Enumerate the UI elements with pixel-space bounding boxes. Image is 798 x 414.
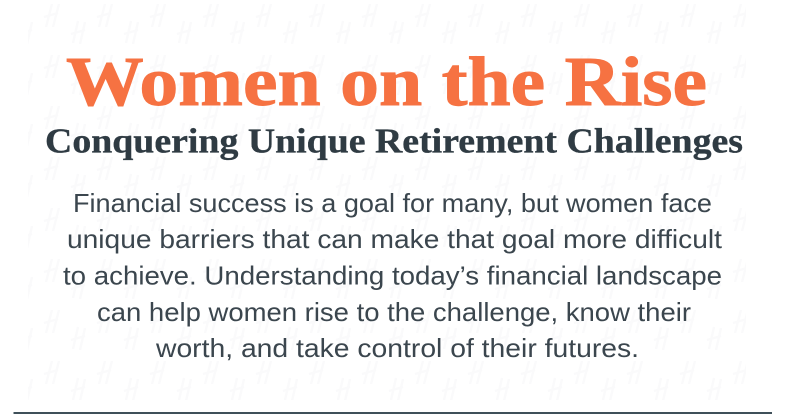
intro paragraph: unique barriers that can make that goal more difficult <box>67 226 722 254</box>
subtitle: Conquering Unique Retirement Challenges <box>45 122 743 160</box>
divider line <box>14 412 772 414</box>
intro paragraph: Financial success is a goal for many, but women face <box>73 190 712 218</box>
intro paragraph: can help women rise to the challenge, know their <box>97 299 691 327</box>
intro paragraph: worth, and take control of their futures. <box>155 335 639 363</box>
intro paragraph: to achieve. Understanding today’s financial landscape <box>63 262 722 290</box>
intro paragraph <box>63 190 722 363</box>
title: Women on the Rise <box>66 44 707 121</box>
